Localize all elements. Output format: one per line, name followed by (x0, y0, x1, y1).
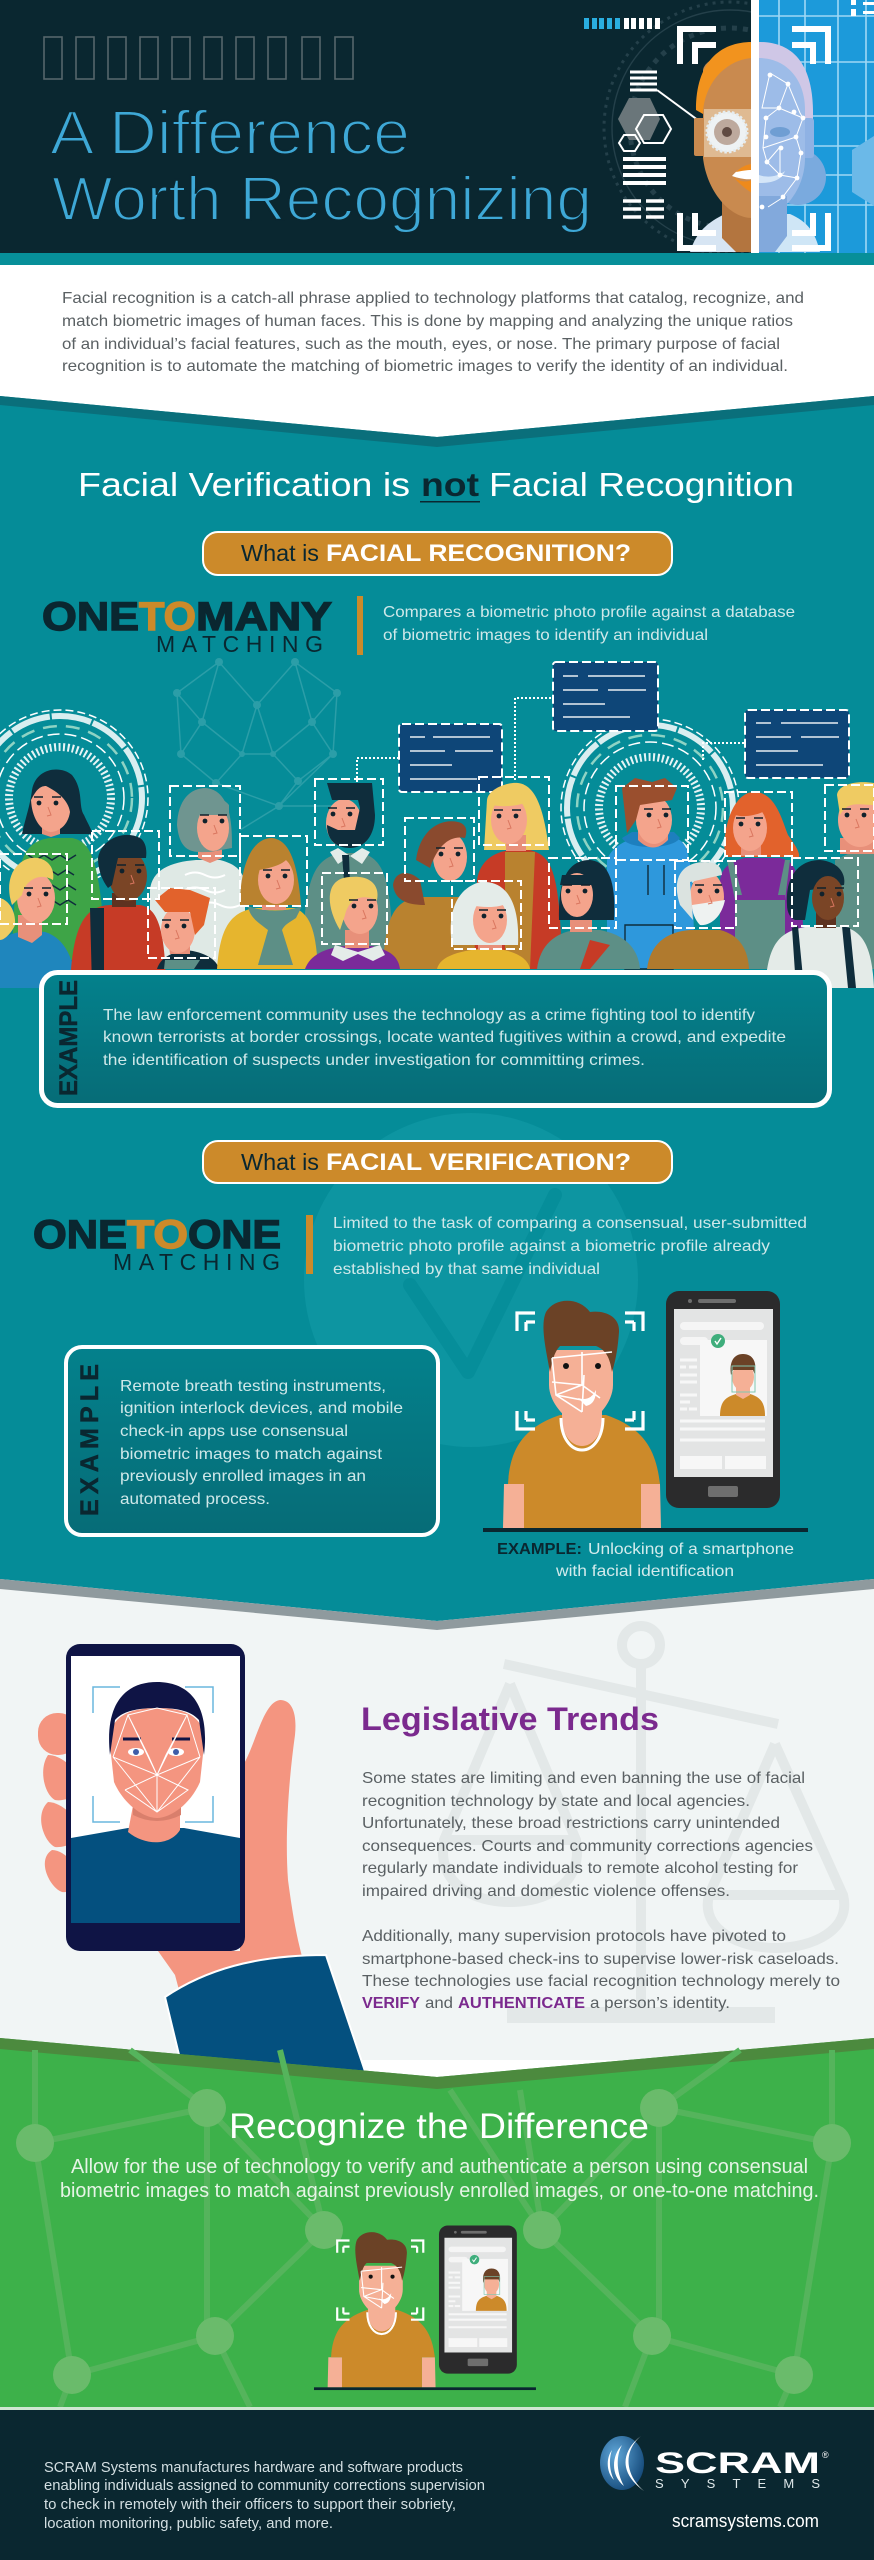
section heading: Facial Verification is (78, 466, 410, 503)
tofu title glyphs (44, 37, 353, 79)
section heading (78, 466, 794, 503)
caption: EXAMPLE: (497, 1541, 582, 1558)
hand palm and thumb (158, 1700, 325, 2020)
second paragraph: These technologies use facial recognition technology merely to (362, 1973, 840, 1990)
shirt (71, 1828, 240, 1923)
second paragraph: a person’s identity. (590, 1995, 730, 2012)
company text: location monitoring, public safety, and more. (44, 2515, 333, 2532)
person: old man beard (647, 862, 749, 969)
fingers (38, 1713, 82, 1892)
example text: The law enforcement community uses the technology as a crime fighting tool to identify (103, 1007, 755, 1024)
face right half (759, 42, 826, 252)
data box C (745, 710, 849, 778)
data box B (553, 662, 658, 731)
person: dark skin woman stripes (765, 860, 874, 988)
verification illustration (483, 1291, 808, 1532)
panel: legislative trends (0, 1579, 874, 2092)
pill: what is facial recognition: What is (241, 540, 319, 566)
caption: Unlocking of a smartphone (588, 1541, 794, 1558)
example text: automated process. (120, 1491, 270, 1508)
person: red hair boy (155, 888, 219, 969)
logo: scram systems: SYSTEMS (655, 2476, 820, 2491)
section heading: Facial Recognition (489, 466, 794, 503)
first paragraph: Some states are limiting and even banning the use of facial (362, 1770, 805, 1787)
person: yellow jacket woman (217, 838, 318, 969)
caption: with facial identification (555, 1563, 734, 1580)
example box: law enforcement (42, 972, 830, 1106)
example text: check-in apps use consensual (120, 1423, 348, 1440)
data lines and hexagons (618, 72, 710, 217)
person: blonde woman blue shirt (0, 858, 76, 988)
face mesh (113, 1708, 200, 1812)
section heading: not (421, 466, 479, 503)
company text: enabling individuals assigned to community corrections supervision (44, 2477, 485, 2494)
title: A Difference (50, 99, 410, 168)
logo: scram systems: SCRAM (655, 2447, 820, 2480)
watermark circle (304, 1113, 638, 1447)
first paragraph: Unfortunately, these broad restrictions carry unintended (362, 1815, 780, 1832)
title (50, 99, 592, 234)
person: blond man right (835, 782, 874, 969)
target ring left (0, 710, 148, 886)
panel: footer (0, 2407, 874, 2560)
first paragraph: consequences. Courts and community corrections agencies (362, 1838, 813, 1855)
icon: scales watermark (443, 1626, 844, 2015)
pill: what is facial verification: FACIAL VERIFICATION? (326, 1149, 631, 1176)
phone (66, 1644, 245, 1951)
logo: scram systems: ® (822, 2450, 829, 2460)
one to many matching logo (42, 595, 332, 657)
intro paragraph: of an individual’s facial features, such as the mouth, eyes, or nose. The primary purpose of facial (62, 336, 780, 353)
company text (44, 2459, 485, 2532)
one to one description: established by that same individual (333, 1261, 600, 1278)
pill: what is facial recognition: FACIAL RECOGNITION? (326, 540, 631, 567)
heading: Legislative Trends (361, 1701, 659, 1737)
one to one matching logo: TO (127, 1213, 188, 1257)
example text: biometric images to match against (120, 1446, 383, 1463)
first paragraph (362, 1770, 813, 1900)
intro paragraph: match biometric images of human faces. This is done by mapping and analyzing the unique ratios (62, 313, 793, 330)
pill: what is facial verification (203, 1141, 672, 1183)
stripe gauge (584, 18, 660, 29)
face detection boxes (0, 777, 874, 958)
example text (103, 1007, 786, 1069)
example text: the identification of suspects under investigation for committing crimes. (103, 1052, 645, 1069)
title: Worth Recognizing (52, 165, 592, 234)
hand holding phone (38, 1644, 372, 2092)
one to one description: Limited to the task of comparing a consensual, user-submitted (333, 1215, 807, 1232)
example text: ignition interlock devices, and mobile (120, 1400, 403, 1417)
person: green sweater woman (12, 770, 106, 960)
example box: remote breath testing (66, 1347, 438, 1535)
pill: what is facial verification: What is (241, 1149, 319, 1175)
one to many description: of biometric images to identify an individual (383, 627, 708, 644)
circuit rings (604, 2, 856, 254)
caption (497, 1541, 794, 1580)
body text: Allow for the use of technology to verify and authenticate a person using consensual (71, 2156, 808, 2178)
one to many matching logo: TO (139, 595, 196, 639)
person: brown hair woman (383, 821, 482, 969)
example text: known terrorists at border crossings, locate wanted fugitives within a crowd, and expedite (103, 1029, 786, 1046)
person: dark skin man red sweater (70, 835, 166, 988)
person: black bob woman (537, 860, 640, 969)
second paragraph: Additionally, many supervision protocols have pivoted to (362, 1928, 786, 1945)
eyes (123, 1738, 190, 1740)
one to many matching logo: MATCHING (156, 631, 323, 657)
one to one matching logo: ONE (33, 1213, 127, 1257)
website: scramsystems.com (672, 2511, 819, 2531)
scan brackets (93, 1687, 213, 1822)
target ring right (561, 719, 739, 897)
gear eye (707, 112, 747, 152)
second paragraph: and (425, 1995, 453, 2012)
person: bearded man (302, 783, 393, 969)
header right blue panel (756, 0, 874, 253)
person: blonde woman red coat (474, 783, 562, 969)
one to many description: Compares a biometric photo profile against a database (383, 604, 795, 621)
network watermark (16, 2050, 851, 2407)
first paragraph: recognition technology by state and local agencies. (362, 1793, 750, 1810)
heading: Recognize the Difference (229, 2107, 649, 2146)
neck (128, 1795, 180, 1842)
company text: SCRAM Systems manufactures hardware and software products (44, 2459, 463, 2476)
network watermark (173, 658, 343, 830)
person: blue hoodie man (607, 778, 694, 969)
second paragraph: AUTHENTICATE (458, 1995, 585, 2012)
example text: previously enrolled images in an (120, 1468, 366, 1485)
first paragraph: impaired driving and domestic violence offenses. (362, 1883, 730, 1900)
panel: recognize the difference (0, 2038, 874, 2408)
scan brackets (677, 26, 831, 251)
second paragraph: VERIFY (362, 1995, 420, 2012)
person: red hair woman overalls (720, 792, 804, 969)
intro paragraph: recognition is to automate the matching of biometric images to verify the identity of an individual. (62, 358, 788, 375)
one to one matching logo: ONE (188, 1213, 281, 1257)
body text: biometric images to match against previously enrolled images, or one-to-one matching. (60, 2180, 819, 2202)
person: white hair woman (437, 882, 530, 969)
panel: header (0, 0, 874, 254)
intro paragraph (62, 290, 804, 375)
person: grey-teal hair woman (150, 788, 245, 969)
white divider (751, 0, 759, 253)
example text: Remote breath testing instruments, (120, 1378, 386, 1395)
one to many description (383, 604, 795, 644)
person: blond boy purple vest (305, 877, 400, 969)
panel: teal comparison section (0, 396, 874, 1621)
intro paragraph: Facial recognition is a catch-all phrase applied to technology platforms that catalog, recognize, and (62, 290, 804, 307)
one to many matching logo: ONE (42, 595, 139, 639)
first paragraph: regularly mandate individuals to remote alcohol testing for (362, 1860, 799, 1877)
vertical example label: EXAMPLE (76, 1364, 104, 1516)
one to many matching logo: MANY (196, 595, 332, 639)
face left half (690, 42, 752, 252)
one to one description (333, 1215, 807, 1278)
one to one matching logo (33, 1213, 281, 1275)
crowd illustration (0, 770, 874, 988)
sleeve (165, 1955, 372, 2092)
pill: what is facial recognition (203, 532, 672, 575)
face (110, 1708, 204, 1818)
one to one matching logo: MATCHING (113, 1249, 280, 1275)
hair (109, 1682, 205, 1755)
vertical example label: EXAMPLE (55, 980, 83, 1096)
second paragraph: smartphone-based check-ins to supervise lower-risk caseloads. (362, 1951, 839, 1968)
teal band (0, 253, 874, 265)
second paragraph (362, 1928, 840, 2012)
one to one description: biometric photo profile against a biometric profile already (333, 1238, 770, 1255)
data box A (357, 698, 745, 792)
example text (120, 1378, 403, 1508)
company text: to check in remotely with their officers to support their sobriety, (44, 2496, 456, 2513)
logo: scram systems (600, 2436, 829, 2491)
body text (60, 2156, 819, 2202)
verification illustration small (314, 2225, 536, 2390)
